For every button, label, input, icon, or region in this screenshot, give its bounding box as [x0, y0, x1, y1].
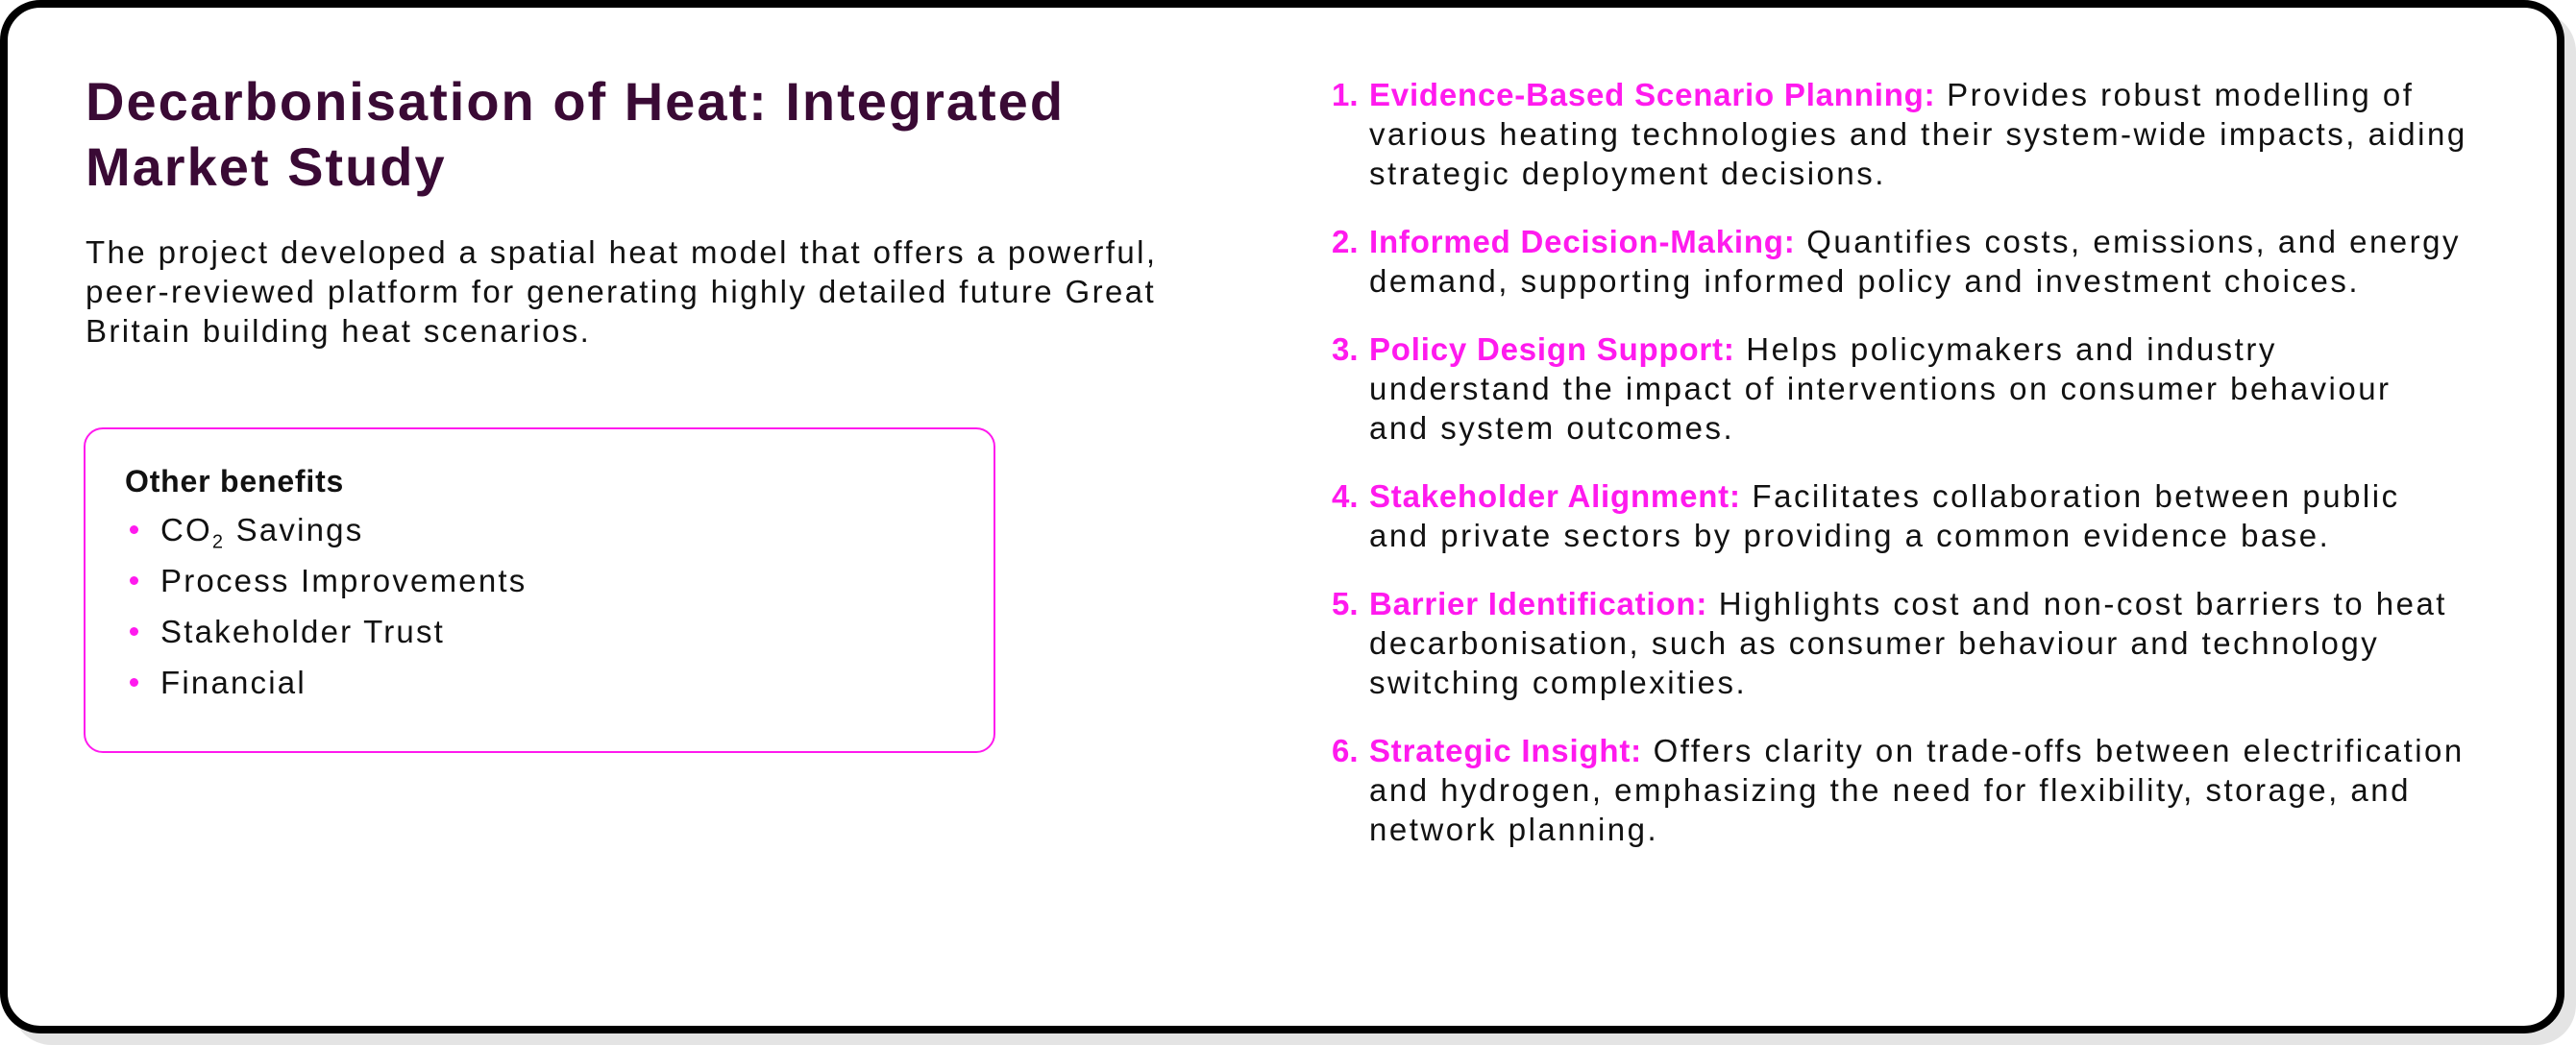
- title: Decarbonisation of Heat: Integrated: [86, 71, 1065, 132]
- text block: intro: The project developed a spatial heat model that offers a powerful,: [86, 234, 1157, 270]
- item 6: and hydrogen, emphasizing the need for flexibility, storage, and: [1369, 772, 2411, 808]
- item 2: demand, supporting informed policy and investment choices.: [1369, 263, 2360, 299]
- text block: intro: [86, 234, 1157, 349]
- item 3: and system outcomes.: [1369, 410, 1734, 446]
- title: [86, 71, 1065, 197]
- item 5: decarbonisation, such as consumer behaviour and technology: [1369, 625, 2379, 661]
- item 1: various heating technologies and their system-wide impacts, aiding: [1369, 116, 2467, 152]
- heading: other benefits: Other benefits: [125, 464, 344, 498]
- item 4: 4.: [1332, 478, 1359, 514]
- bullet list: [130, 512, 527, 700]
- item 5: [1332, 586, 2447, 700]
- item 1: strategic deployment decisions.: [1369, 156, 1886, 191]
- text block: intro: peer-reviewed platform for generating highly detailed future Great: [86, 274, 1156, 309]
- item 3: Policy Design Support: Helps policymakers and industry: [1369, 331, 2277, 367]
- item 6: 6.: [1332, 733, 1359, 768]
- item 3: 3.: [1332, 331, 1359, 367]
- item 5: 5.: [1332, 586, 1359, 621]
- item 6: network planning.: [1369, 812, 1658, 847]
- item 2: 2.: [1332, 224, 1359, 259]
- item 3: understand the impact of interventions on consumer behaviour: [1369, 371, 2392, 406]
- item 5: Barrier Identification: Highlights cost and non-cost barriers to heat: [1369, 586, 2447, 621]
- item 4: and private sectors by providing a common evidence base.: [1369, 518, 2330, 553]
- title: Market Study: [86, 136, 447, 197]
- panel: other benefits: [84, 427, 995, 753]
- text block: intro: Britain building heat scenarios.: [86, 313, 591, 349]
- item 6: [1332, 733, 2465, 847]
- item 2: Informed Decision-Making: Quantifies costs, emissions, and energy: [1369, 224, 2461, 259]
- item 1: 1.: [1332, 77, 1359, 112]
- item 5: switching complexities.: [1369, 665, 1747, 700]
- bullet list: Financial: [160, 665, 307, 700]
- item 2: [1332, 224, 2461, 299]
- item 1: Evidence-Based Scenario Planning: Provides robust modelling of: [1369, 77, 2414, 112]
- numbered list: benefits: [1332, 77, 2467, 847]
- item 1: [1332, 77, 2467, 191]
- bullet list: Stakeholder Trust: [160, 614, 445, 649]
- item 3: [1332, 331, 2392, 446]
- bullet list: Process Improvements: [160, 563, 527, 598]
- bullet list: CO2 Savings: [160, 512, 363, 553]
- item 4: [1332, 478, 2400, 553]
- item 4: Stakeholder Alignment: Facilitates collaboration between public: [1369, 478, 2400, 514]
- item 6: Strategic Insight: Offers clarity on trade-offs between electrification: [1369, 733, 2465, 768]
